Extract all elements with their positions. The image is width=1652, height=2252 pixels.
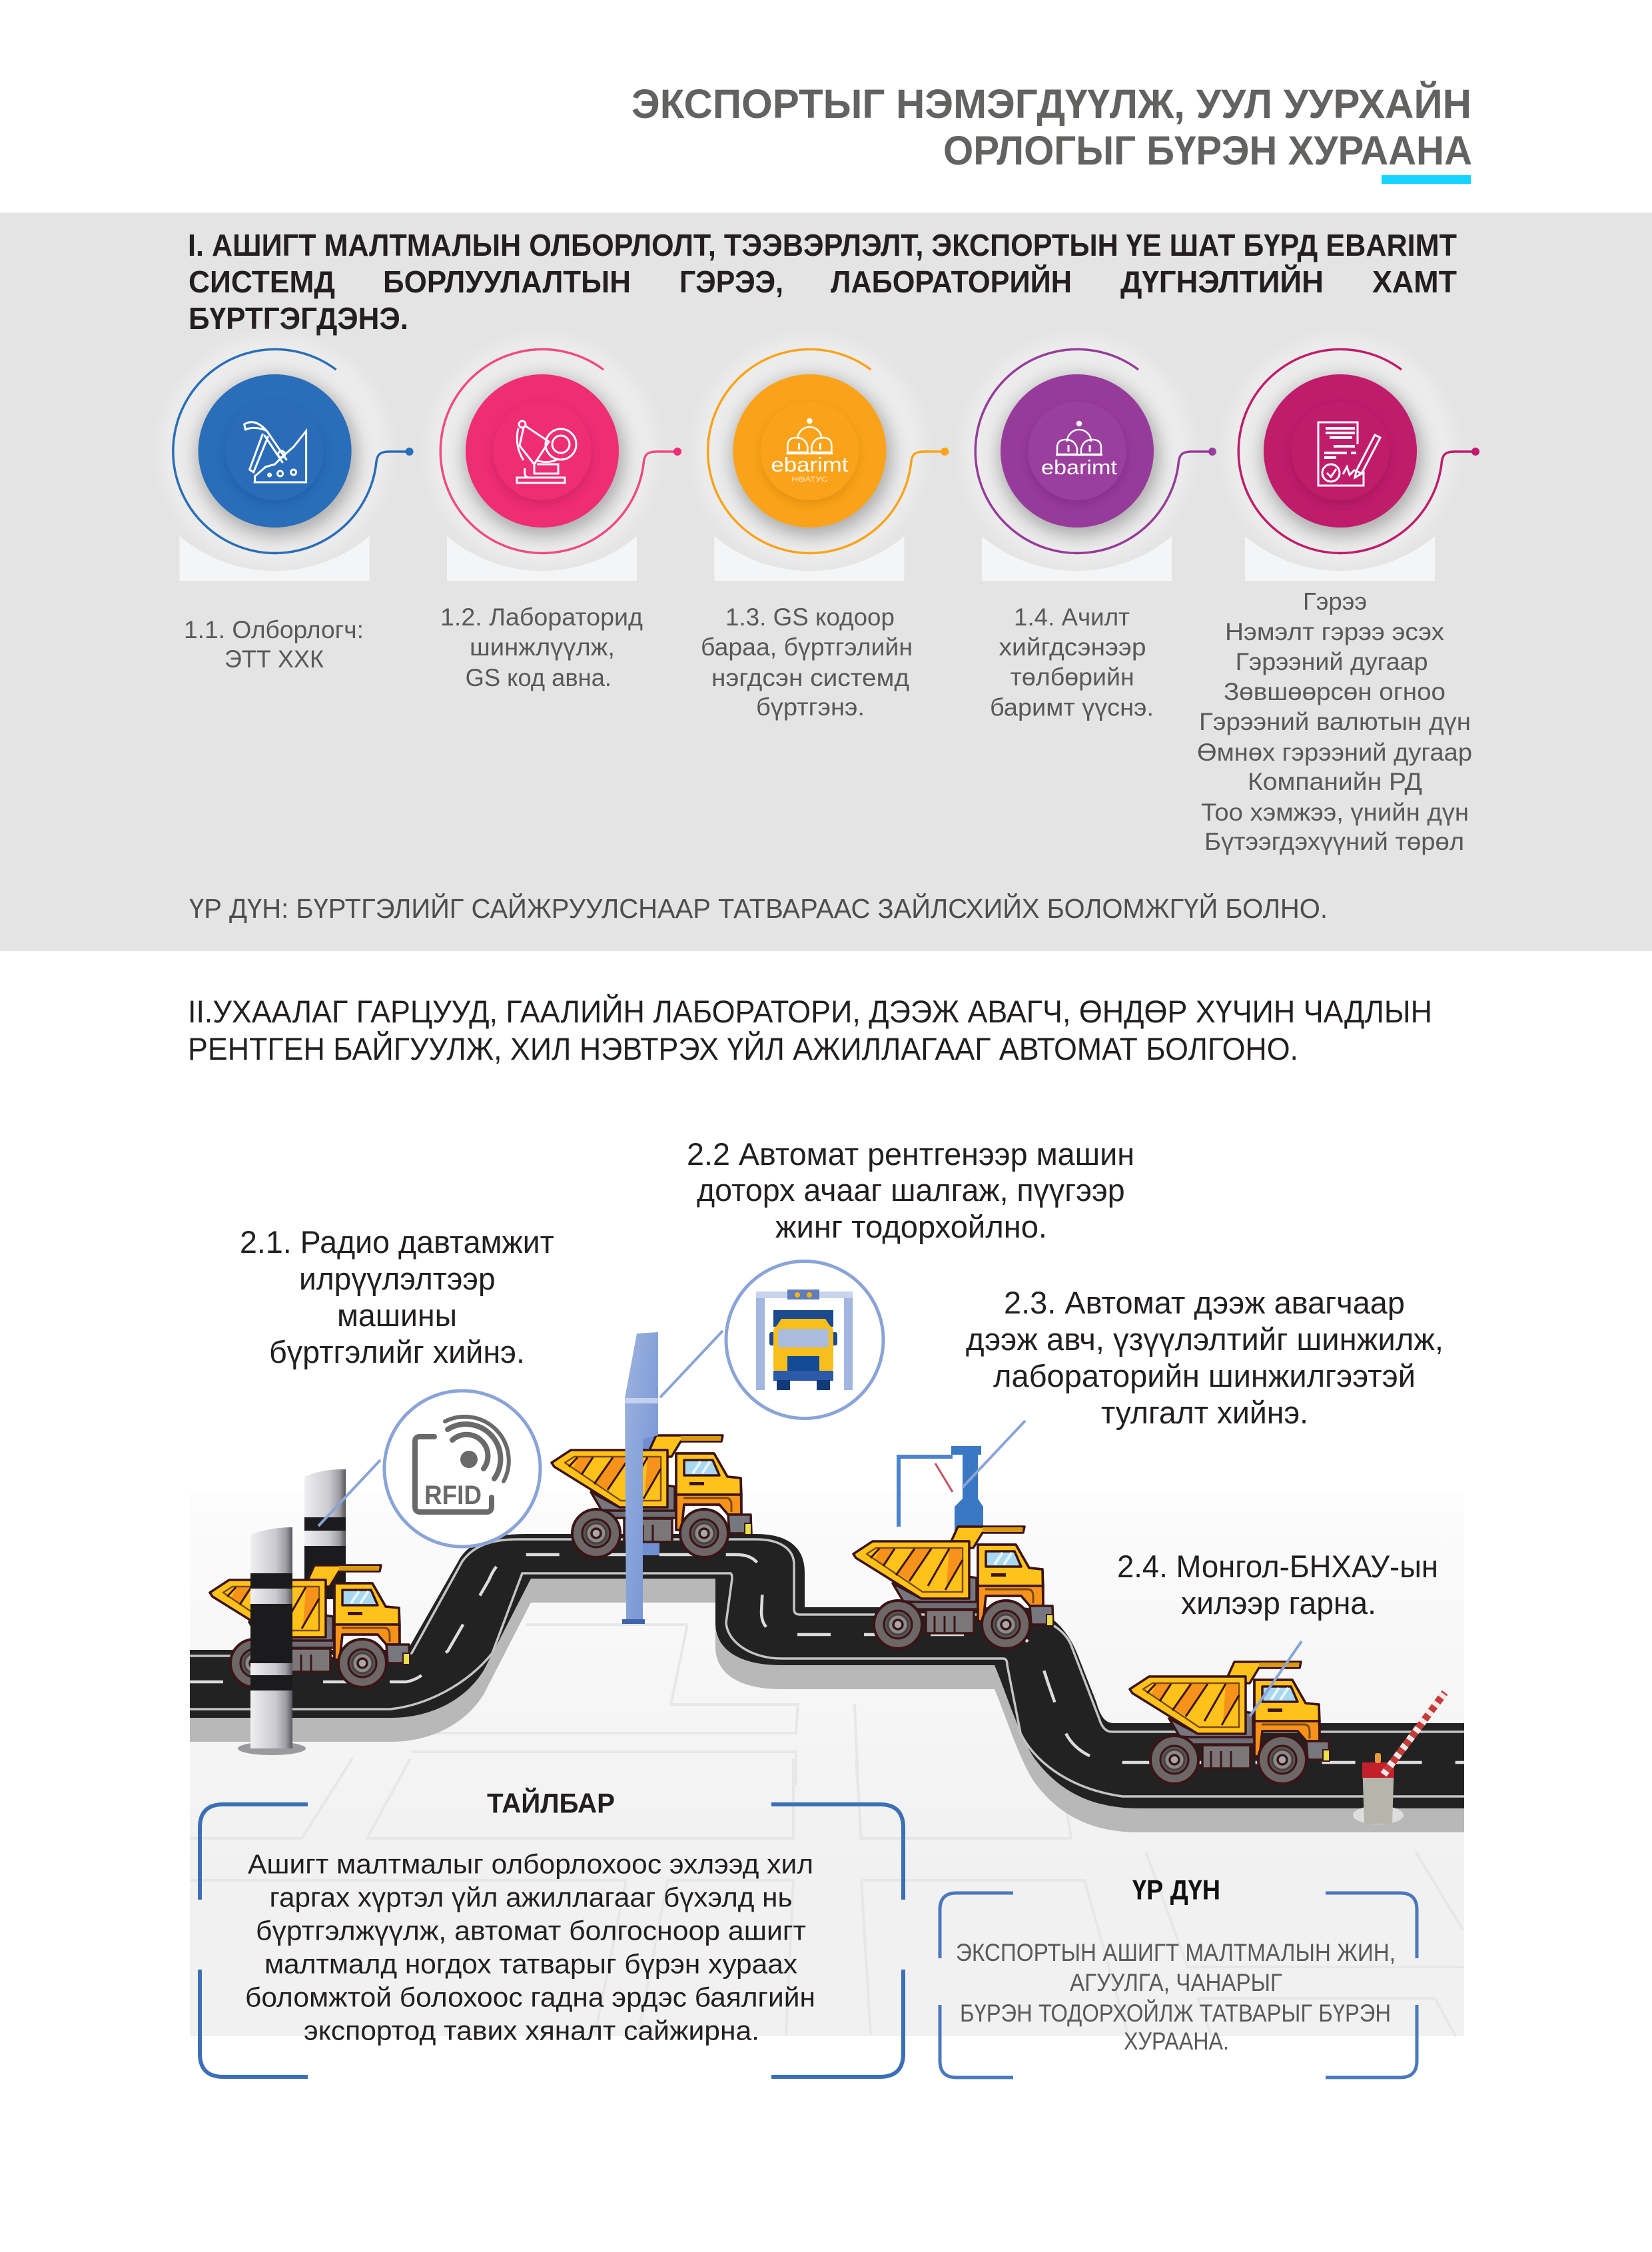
heading: section II: РЕНТГЕН БАЙГУУЛЖ, ХИЛ НЭВТРЭХ ҮЙЛ АЖИЛЛАГААГ АВТОМАТ БОЛГОНО. [188,1031,1298,1066]
panel: section I [0,212,1652,951]
road edge lines [190,1539,1464,1732]
caption 1.1: ЭТТ ХХК [224,645,324,673]
explanation body: Ашигт малтмалыг олборлохоос эхлээд хил [248,1849,813,1880]
caption 1.4 [990,603,1154,721]
caption 2.3: дээж авч, үзүүлэлтийг шинжилж, [966,1321,1444,1357]
caption 1.5: contract fields: Гэрээний валютын дүн [1199,708,1471,735]
icon: ebarimt logo: ebarimt [771,453,849,476]
truck 2 [552,1435,751,1557]
caption 1.5: contract fields: Гэрээ [1303,588,1367,615]
bracket frame [200,1804,903,2077]
icon: signed contract [1318,422,1380,486]
caption 1.5: contract fields: Компанийн РД [1248,768,1422,795]
caption 1.2: 1.2. Лабораторид [440,603,643,631]
border barrier [1353,1692,1445,1824]
caption 1.3: бараа, бүртгэлийн [701,633,913,661]
heading: section I: ГЭРЭЭ, [679,264,783,299]
icon: ebarimt logo [771,419,849,484]
caption 1.4: төлбөрийн [1011,663,1134,691]
heading: section I: СИСТЕМД [189,264,335,299]
step 1.1: blue circle [161,336,414,581]
icon: X-ray scanner with truck [726,1262,883,1419]
heading: section I: ДҮГНЭЛТИЙН [1120,264,1324,299]
truck 1 [210,1565,410,1687]
explanation heading: ТАЙЛБАР [487,1787,615,1819]
truck 3 [853,1527,1053,1649]
result body: АГУУЛГА, ЧАНАРЫГ [1070,1969,1282,1996]
caption 1.1 [184,616,364,673]
floor background [190,1492,1464,2036]
pointer line to RFID [318,1460,380,1526]
caption 1.3: бүртгэнэ. [756,693,865,721]
heading: section I: I. АШИГТ МАЛТМАЛЫН ОЛБОРЛОЛТ, ТЭЭВЭРЛЭЛТ, ЭКСПОРТЫН ҮЕ ШАТ БҮРД EBARIMT [188,228,1457,262]
illustration: border road scene [190,1262,1464,2036]
caption 2.4 [1117,1549,1438,1621]
explanation body: малтмалд ногдох татварыг бүрэн хураах [264,1949,798,1980]
caption 1.5: contract fields: Тоо хэмжээ, үнийн дүн [1201,799,1469,826]
road shadow [190,1558,1464,1832]
caption 1.5: contract fields [1197,588,1472,855]
road [190,1534,1464,1808]
caption 1.2: GS код авна. [466,664,612,691]
caption 1.3: 1.3. GS кодоор [725,603,895,631]
caption 2.1 [240,1224,554,1369]
step 1.4: purple circle [963,336,1216,581]
icon: ebarimt logo: ebarimt [1041,456,1117,479]
caption 2.1: илрүүлэлтээр [299,1261,496,1296]
caption 2.3 [966,1285,1444,1430]
caption 1.5: contract fields: Нэмэлт гэрээ эсэх [1225,618,1445,645]
title accent bar [1382,175,1471,184]
X-ray gate, rear part [643,1435,659,1555]
pointer line to X-ray [660,1331,723,1397]
title [631,81,1472,173]
result body [956,1939,1396,2055]
explanation body [245,1849,815,2046]
caption 2.2: доторх ачааг шалгаж, пүүгээр [697,1172,1125,1208]
caption 2.1: 2.1. Радио давтамжит [240,1224,554,1260]
heading: section II [188,994,1432,1066]
panel: result [940,1874,1417,2077]
floor plan lines [190,1625,1464,2036]
pointer line to sampler [963,1421,1025,1487]
step 1.5: magenta circle [1226,336,1479,581]
explanation body: гаргах хүртэл үйл ажиллагааг бүхэлд нь [269,1882,793,1913]
icon: RFID badge: RFID [424,1481,482,1510]
RFID pole, rear [304,1469,346,1599]
caption 2.3: 2.3. Автомат дээж авагчаар [1004,1285,1405,1320]
caption 2.3: тулгалт хийнэ. [1101,1395,1308,1430]
RFID pole, front [238,1527,306,1755]
heading: section II: II.УХААЛАГ ГАРЦУУД, ГААЛИЙН ЛАБОРАТОРИ, ДЭЭЖ АВАГЧ, ӨНДӨР ХҮЧИН ЧАДЛЫН [188,994,1432,1029]
caption 1.4: хийгдсэнээр [999,633,1146,661]
result body: БҮРЭН ТОДОРХОЙЛЖ ТАТВАРЫГ БҮРЭН [960,1999,1391,2027]
caption 2.3: лабораторийн шинжилгээтэй [993,1358,1416,1393]
sampling crane [899,1446,983,1532]
caption 1.3 [701,603,913,721]
result heading: ҮР ДҮН [1132,1874,1220,1906]
title: ОРЛОГЫГ БҮРЭН ХУРААНА [943,128,1472,173]
step 1.2: pink circle [428,336,681,581]
explanation body: боломжтой болохоос гадна эрдэс баялгийн [245,1982,815,2013]
icon: pickaxe and ore [244,422,306,482]
caption 1.5: contract fields: Бүтээгдэхүүний төрөл [1204,828,1464,855]
heading: section I: БОРЛУУЛАЛТЫН [383,264,631,299]
icon: RFID badge [384,1391,540,1547]
step 1.3: orange circle [695,336,949,581]
caption 1.5: contract fields: Өмнөх гэрээний дугаар [1197,739,1472,766]
result body: ЭКСПОРТЫН АШИГТ МАЛТМАЛЫН ЖИН, [956,1939,1396,1966]
explanation body: экспортод тавих хяналт сайжирна. [304,2016,759,2046]
caption 2.1: машины [337,1298,457,1333]
bracket frame [940,1893,1417,2077]
caption 1.2 [440,603,643,691]
caption 1.5: contract fields: Гэрээний дугаар [1236,648,1428,675]
pointer line to border [1250,1641,1302,1716]
explanation body: бүртгэлжүүлж, автомат болгосноор ашигт [256,1916,806,1946]
caption 1.3: нэгдсэн системд [711,664,909,691]
caption 2.2: жинг тодорхойлно. [775,1209,1047,1244]
title: ЭКСПОРТЫГ НЭМЭГДҮҮЛЖ, УУЛ УУРХАЙН [631,81,1471,127]
caption 1.5: contract fields: Зөвшөөрсөн огноо [1224,678,1446,705]
panel: explanation [200,1787,903,2077]
caption 1.2: шинжлүүлж, [470,633,615,661]
heading: section I: ЛАБОРАТОРИЙН [831,264,1072,299]
caption 1.4: 1.4. Ачилт [1014,603,1130,631]
road centre dashes [190,1555,1464,1762]
caption 1.4: баримт үүснэ. [990,694,1154,721]
caption 1.1: 1.1. Олборлогч: [184,616,364,643]
X-ray gate [622,1332,658,1624]
truck 4 [1130,1662,1330,1784]
caption 2.4: 2.4. Монгол-БНХАУ-ын [1117,1549,1438,1584]
icon: ebarimt logo: НӨАТУС [791,476,827,484]
icon: ebarimt logo [1041,422,1117,479]
result body: ХУРААНА. [1124,2028,1229,2055]
heading: section I [188,228,1457,336]
caption 2.4: хилээр гарна. [1181,1585,1376,1621]
caption 2.2: 2.2 Автомат рентгенээр машин [687,1136,1134,1172]
result line, section I: ҮР ДҮН: БҮРТГЭЛИЙГ САЙЖРУУЛСНААР ТАТВАРААС ЗАЙЛСХИЙХ БОЛОМЖГҮЙ БОЛНО. [189,893,1328,924]
heading: section I: ХАМТ [1372,264,1457,299]
caption 2.2 [687,1136,1134,1244]
heading: section I: БҮРТГЭГДЭНЭ. [189,301,408,336]
caption 2.1: бүртгэлийг хийнэ. [269,1334,525,1369]
icon: microscope [517,421,576,483]
